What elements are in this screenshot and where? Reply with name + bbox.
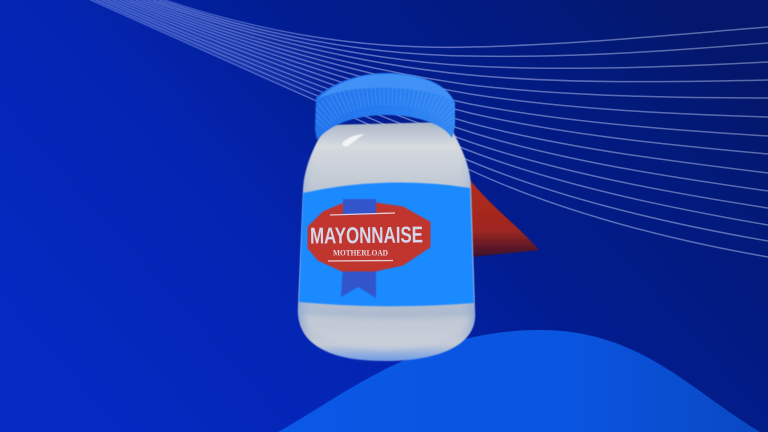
lower highlight	[304, 314, 470, 350]
jar label	[299, 183, 474, 306]
light band where lines converge	[90, 0, 340, 112]
jar lid	[315, 73, 456, 140]
jar body	[298, 122, 475, 361]
red badge	[308, 203, 430, 271]
hill shape	[278, 330, 760, 432]
badge rules	[328, 213, 395, 261]
lid top	[318, 74, 453, 101]
lid ridges	[316, 93, 456, 122]
brand name: MAYONNAISE	[310, 221, 423, 249]
jar	[298, 73, 475, 361]
lid side	[315, 73, 455, 140]
shoulder highlight	[342, 134, 364, 147]
cape	[470, 180, 539, 257]
flowing lines	[90, 0, 768, 257]
sub-brand: MOTHERLOAD	[333, 248, 388, 258]
ribbon upper tab	[343, 199, 376, 215]
glass edge tint	[298, 122, 475, 361]
ribbon lower tail	[341, 265, 376, 298]
